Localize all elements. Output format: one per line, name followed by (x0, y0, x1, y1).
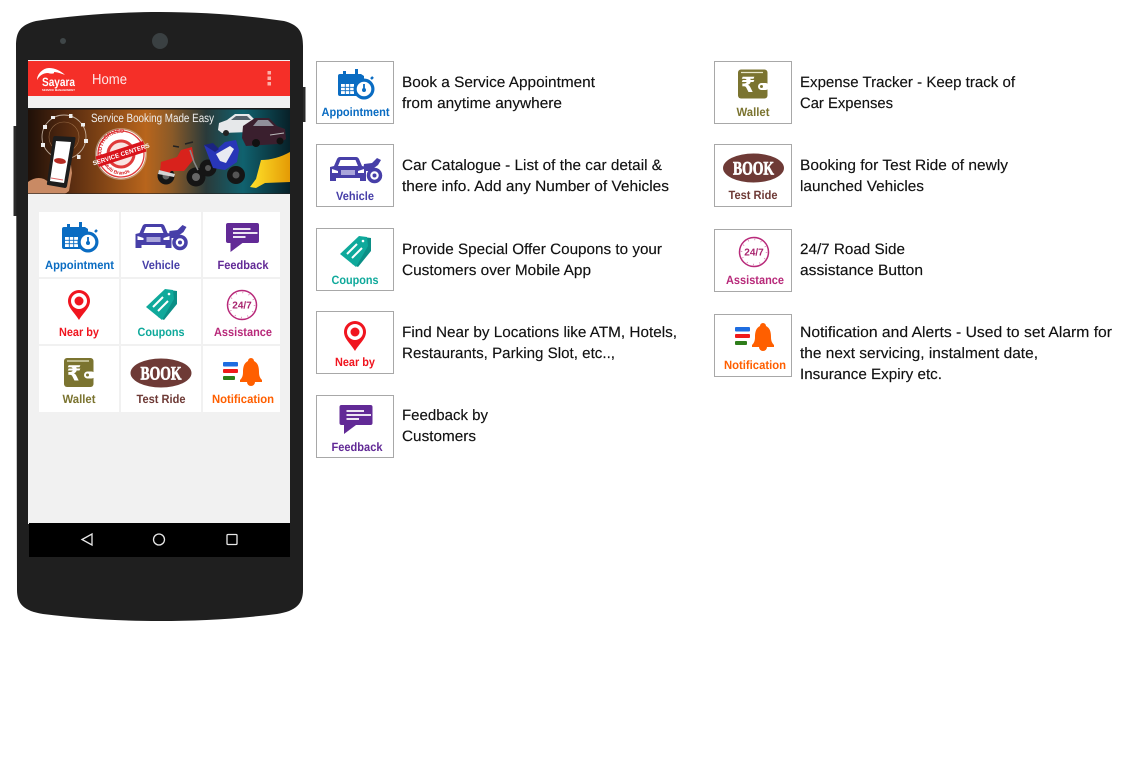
stamp (92, 128, 151, 180)
tile: notification (203, 346, 280, 412)
tile: wallet: Wallet (62, 392, 96, 406)
coupons text: Customers over Mobile App (402, 262, 591, 279)
recent button (227, 534, 237, 544)
feature: assistance (714, 230, 923, 292)
side buttons (14, 87, 306, 216)
coupons text (402, 241, 662, 279)
back button (82, 534, 92, 545)
tile: test ride (121, 346, 201, 412)
tile: near by: Near by (59, 325, 99, 339)
app header (28, 61, 290, 96)
screen (28, 60, 290, 557)
tile: vehicle: Vehicle (142, 258, 180, 272)
app menu grid (39, 212, 280, 412)
coupons badge (316, 228, 394, 290)
vehicle text (402, 157, 669, 195)
tile: appointment (39, 212, 119, 277)
feedback badge: Feedback (332, 440, 383, 454)
feedback text (402, 407, 488, 445)
feature: feedback (316, 396, 488, 458)
vehicle text: Car Catalogue - List of the car detail & (402, 157, 662, 174)
wallet badge (714, 62, 792, 124)
test ride text (800, 157, 1009, 195)
coupons badge: Coupons (332, 273, 379, 287)
tile: wallet (39, 346, 119, 412)
red motorcycle (158, 142, 206, 186)
feature: notification (714, 314, 1112, 383)
near by text: Restaurants, Parking Slot, etc.., (402, 345, 615, 362)
phone (14, 12, 306, 621)
tile: coupons (121, 279, 201, 344)
assistance text: assistance Button (800, 262, 923, 279)
assistance badge: Assistance (726, 273, 784, 287)
appointment text (402, 74, 596, 112)
test ride text: Booking for Test Ride of newly (800, 157, 1009, 174)
notification text: the next servicing, instalment date, (800, 345, 1038, 362)
tile: appointment: Appointment (45, 258, 114, 272)
tile: assistance (203, 279, 280, 344)
feature: coupons (316, 228, 662, 290)
vehicle badge (316, 144, 394, 206)
menu dots (268, 71, 271, 86)
test ride text: launched Vehicles (800, 178, 924, 195)
appointment text: Book a Service Appointment (402, 74, 596, 91)
phone and hand (28, 136, 76, 194)
banner headline: Service Booking Made Easy (91, 111, 214, 125)
appointment text: from anytime anywhere (402, 95, 562, 112)
orbit (41, 114, 88, 159)
feature: wallet (714, 62, 1016, 124)
tile: feedback: Feedback (218, 258, 269, 272)
near by badge: Near by (335, 355, 375, 369)
stamp: Multi Brands (104, 164, 130, 175)
home title: Home (92, 72, 127, 88)
test ride badge (714, 144, 792, 206)
tile: notification: Notification (212, 392, 274, 406)
notification text: Notification and Alerts - Used to set Alarm for (800, 324, 1112, 341)
tile: near by (39, 279, 119, 344)
notification text (800, 324, 1112, 383)
navigation bar (29, 523, 290, 557)
feature: vehicle (316, 144, 669, 206)
sensor (60, 38, 66, 44)
stamp: AUTHORIZED (98, 128, 124, 155)
home button (154, 534, 164, 545)
cars (218, 114, 286, 147)
near by text: Find Near by Locations like ATM, Hotels, (402, 324, 677, 341)
wallet badge: Wallet (736, 105, 770, 119)
vehicle badge: Vehicle (336, 189, 374, 203)
appointment badge: Appointment (322, 105, 390, 119)
wallet text: Car Expenses (800, 95, 893, 112)
logo: Sayara (42, 75, 75, 89)
banner (28, 108, 290, 194)
appointment badge (316, 62, 394, 124)
assistance text: 24/7 Road Side (800, 241, 905, 258)
logo: SERVICE MANAGEMENT (42, 88, 75, 92)
assistance badge (714, 230, 792, 292)
vehicle text: there info. Add any Number of Vehicles (402, 178, 669, 195)
tile: vehicle (121, 212, 201, 277)
yellow ribbon (250, 152, 290, 188)
wallet text (800, 74, 1016, 112)
assistance text (800, 241, 923, 279)
notification text: Insurance Expiry etc. (800, 366, 942, 383)
feedback badge (316, 396, 394, 458)
coupons text: Provide Special Offer Coupons to your (402, 241, 662, 258)
tile: feedback (203, 212, 280, 277)
feature: test ride (714, 144, 1009, 206)
phone body (16, 12, 303, 621)
near by badge (316, 312, 394, 374)
near by text (402, 324, 677, 362)
feature: appointment (316, 62, 596, 124)
tile: test ride: Test Ride (136, 392, 186, 406)
camera (152, 33, 168, 49)
tile: assistance: Assistance (214, 325, 272, 339)
notification badge: Notification (724, 358, 786, 372)
test ride badge: Test Ride (728, 188, 778, 202)
feedback text: Feedback by (402, 407, 488, 424)
feature: near by (316, 312, 677, 374)
notification badge (714, 314, 792, 376)
logo (37, 68, 75, 92)
wallet text: Expense Tracker - Keep track of (800, 74, 1016, 91)
feedback text: Customers (402, 428, 476, 445)
blue motorcycle (200, 140, 245, 184)
stamp: SERVICE CENTERS (92, 142, 151, 167)
tile: coupons: Coupons (138, 325, 185, 339)
